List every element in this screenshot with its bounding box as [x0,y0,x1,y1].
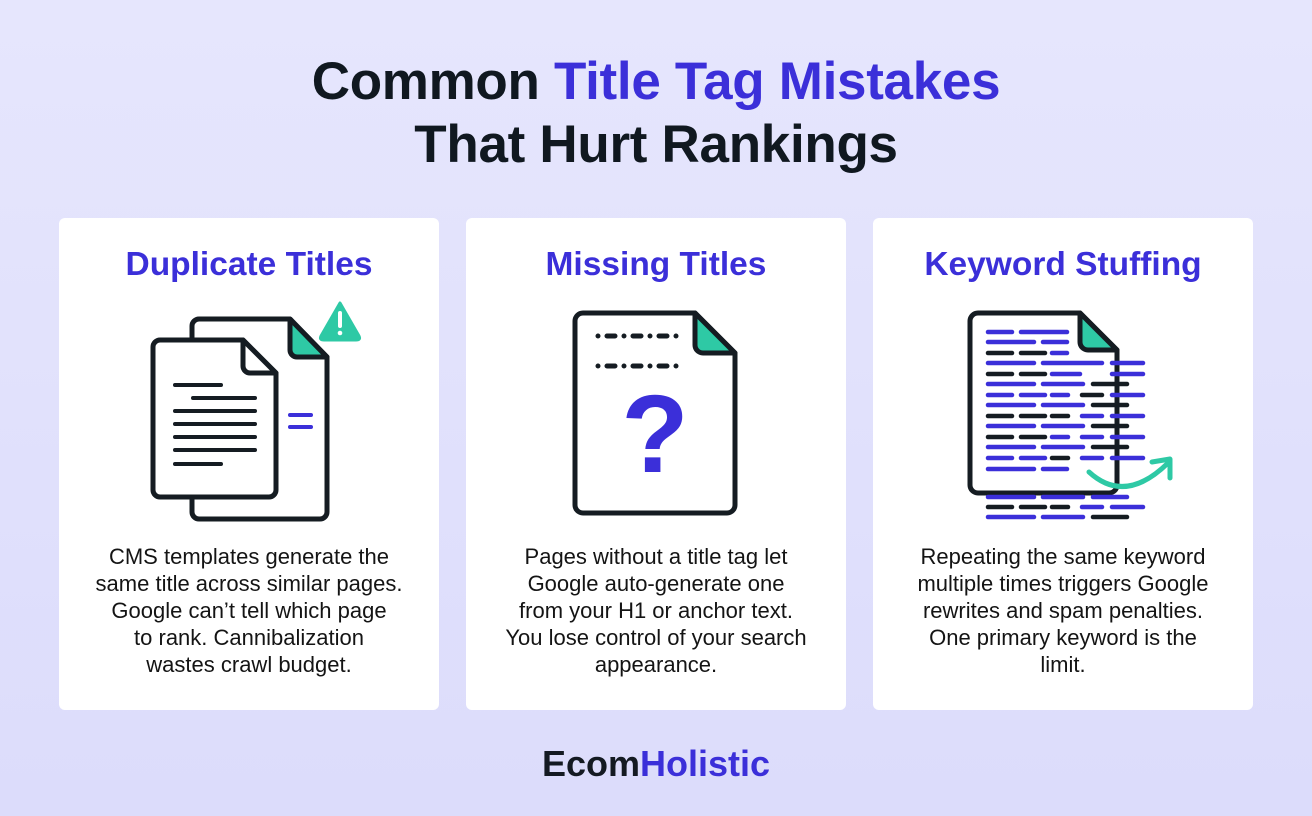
text: duplicate titles: same title across similar pages. [96,571,402,596]
icon: keyword stuffed document [970,313,1143,517]
text: keyword stuffing: Repeating the same keyword [921,544,1205,569]
text: keyword stuffing: One primary keyword is the [929,625,1197,650]
text: missing titles [505,544,807,677]
text: duplicate titles: wastes crawl budget. [146,652,352,677]
title [312,52,1000,174]
text: keyword stuffing [917,544,1208,677]
icon: missing title document: ? [621,373,689,496]
text: missing titles: You lose control of your search [505,625,807,650]
text: missing titles: from your H1 or anchor text. [519,598,793,623]
text: duplicate titles: to rank. Cannibalization [134,625,364,650]
heading: keyword stuffing: Keyword Stuffing [924,246,1202,283]
text: missing titles: appearance. [595,652,717,677]
brand footer: EcomHolistic [542,743,770,784]
icon: missing title document [575,313,735,513]
text: duplicate titles: Google can’t tell which page [111,598,387,623]
icon: curved arrow [1089,459,1170,487]
text: missing titles: Pages without a title tag let [525,544,787,569]
heading: missing titles: Missing Titles [546,246,766,283]
heading: duplicate titles: Duplicate Titles [126,246,372,283]
title: Common Title Tag Mistakes [312,52,1000,111]
text: missing titles: Google auto-generate one [528,571,784,596]
title: That Hurt Rankings [414,115,898,174]
panel: keyword stuffing [873,218,1253,710]
text: duplicate titles [96,544,402,677]
panel: duplicate titles [59,218,439,710]
panel: missing titles [466,218,846,710]
text: keyword stuffing: rewrites and spam penalties. [923,598,1203,623]
icon: duplicate documents [153,319,327,519]
text: duplicate titles: CMS templates generate the [109,544,389,569]
text: keyword stuffing: multiple times triggers Google [917,571,1208,596]
text: keyword stuffing: limit. [1040,652,1086,677]
icon: warning triangle [320,303,360,340]
